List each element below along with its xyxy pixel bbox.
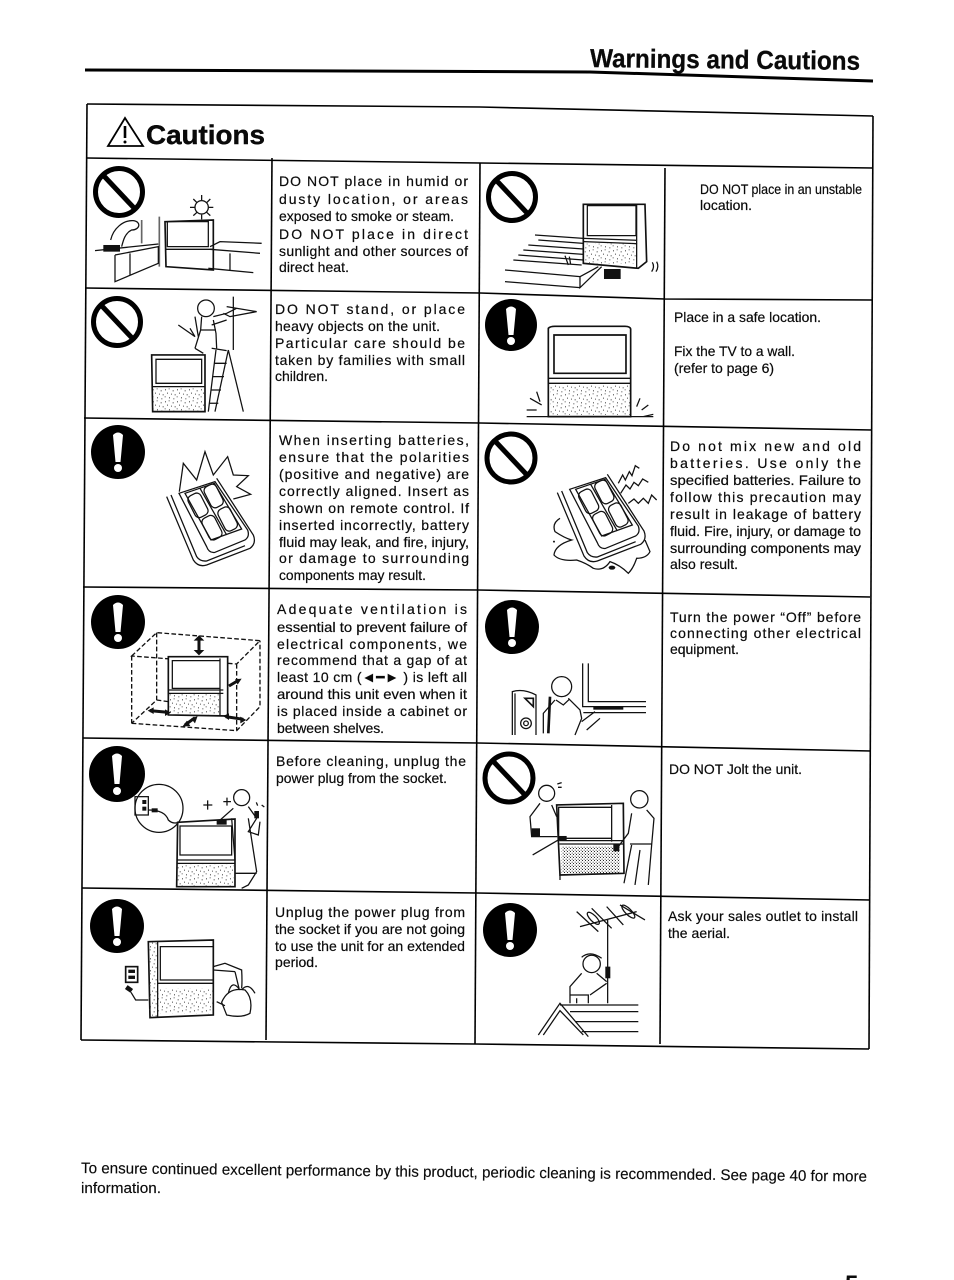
text block: inserted incorrectly, battery [279, 517, 469, 533]
text block: equipment. [670, 641, 739, 657]
icon: exclamation [90, 899, 144, 953]
icon: exclamation [89, 746, 145, 802]
panel: unplug before cleaning [89, 746, 466, 888]
text block: also result. [670, 556, 738, 572]
illustration: man connecting equipment to TV [512, 663, 646, 735]
text block: direct heat. [279, 259, 349, 275]
text block: sunlight and other sources of [279, 243, 468, 259]
illustration: two men carrying TV [530, 783, 654, 885]
icon: exclamation [485, 299, 537, 351]
text block: surrounding components may [670, 540, 861, 556]
text block [275, 904, 465, 970]
text block: (refer to page 6) [674, 360, 774, 376]
illustration: worker installing aerial on roof [538, 903, 645, 1037]
panel: aerial installation [483, 903, 858, 1037]
illustration: remote with leaking batteries [553, 466, 657, 573]
icon: exclamation [91, 425, 145, 479]
footer note [81, 1160, 867, 1197]
text block [668, 908, 858, 941]
illustration: TV with plug and suitcase [125, 940, 255, 1018]
text block [275, 301, 465, 384]
text block: Unplug the power plug from [275, 904, 465, 920]
illustration: TV on uneven steps [505, 204, 658, 288]
text block: Particular care should be [275, 335, 465, 351]
illustration: TV in dashed cabinet with gap arrows [132, 633, 260, 731]
icon: prohibition [487, 434, 535, 482]
icon: prohibition [94, 298, 140, 346]
text block [674, 309, 821, 376]
text block: Ask your sales outlet to install [668, 908, 858, 924]
panel: humid or dusty location [95, 168, 468, 282]
footer note: To ensure continued excellent performance by this product, periodic cleaning is recommended. See page 40 for more [81, 1160, 867, 1186]
text block: Place in a safe location. [674, 309, 821, 325]
text block: is placed inside a cabinet or [277, 703, 467, 719]
text block [670, 609, 861, 657]
icon: prohibition [485, 754, 533, 802]
text block: specified batteries. Failure to [670, 472, 861, 488]
illustration: child on ladder above TV [152, 297, 257, 412]
text block: fluid. Fire, injury, or damage to [670, 523, 861, 539]
text block: heavy objects on the unit. [275, 318, 440, 334]
text block: Turn the power “Off” before [670, 609, 861, 625]
text block: (positive and negative) are [279, 466, 469, 482]
text block: shown on remote control. If [279, 500, 469, 516]
illustration: TV near kitchen and sun [95, 195, 262, 282]
panel: do not jolt [485, 754, 802, 885]
panel: ventilation [91, 595, 467, 736]
panel: power off before connecting [485, 600, 861, 735]
text block: DO NOT place in an unstable [700, 181, 862, 197]
text block: or damage to surrounding [279, 550, 469, 566]
illustration: person unplugging TV at socket [135, 784, 264, 888]
text block: recommend that a gap of at [277, 652, 467, 668]
text block [277, 601, 467, 736]
text block: electrical components, we [277, 636, 467, 652]
text block [279, 432, 469, 583]
text block: the aerial. [668, 925, 730, 941]
icon: prohibition [488, 174, 536, 220]
title: Warnings and Cautions: Warnings and Cautions [590, 43, 860, 76]
text block: components may result. [279, 567, 426, 583]
text block: DO NOT stand, or place [275, 301, 465, 317]
text block: essential to prevent failure of [277, 619, 467, 635]
text block [700, 181, 862, 213]
text block: Before cleaning, unplug the [276, 753, 466, 769]
text block: around this unit even when it [277, 686, 467, 702]
panel: unstable location [488, 174, 862, 288]
text block: between shelves. [277, 720, 384, 736]
heading: Cautions with warning triangle: Cautions [146, 120, 265, 150]
text block: result in leakage of battery [670, 506, 861, 522]
footer note: information. [81, 1180, 161, 1197]
icon: prohibition [96, 168, 142, 216]
text block: When inserting batteries, [279, 432, 469, 448]
text block: Adequate ventilation is [277, 601, 467, 617]
text block: to use the unit for an extended [275, 938, 465, 954]
text block: power plug from the socket. [276, 770, 447, 786]
text block: children. [275, 368, 328, 384]
text block: DO NOT place in direct [279, 226, 468, 242]
icon: exclamation [485, 600, 539, 654]
panel: do not mix batteries [487, 434, 861, 573]
header rule [85, 70, 873, 81]
text block: location. [700, 197, 752, 213]
text block: batteries. Use only the [670, 455, 861, 471]
table grid [81, 104, 873, 1049]
text block: Fix the TV to a wall. [674, 343, 795, 359]
illustration: TV fixed to wall [527, 326, 653, 417]
text block: least 10 cm (◄━► ) is left all [277, 669, 467, 685]
text block [276, 753, 466, 786]
illustration: remote with batteries and flash [167, 452, 254, 566]
heading: Cautions with warning triangle [108, 118, 265, 150]
text block: taken by families with small [275, 352, 465, 368]
text block: DO NOT Jolt the unit. [669, 761, 802, 777]
text block: follow this precaution may [670, 489, 861, 505]
icon: exclamation [91, 595, 145, 649]
icon: exclamation [483, 903, 537, 957]
panel: unplug when not in use [90, 899, 465, 1018]
text block: Do not mix new and old [670, 438, 861, 454]
panel: place in a safe location [485, 299, 821, 417]
text block: connecting other electrical [670, 625, 861, 641]
text block [279, 173, 468, 275]
text block [670, 438, 861, 572]
text block: ensure that the polarities [279, 449, 469, 465]
text block: fluid may leak, and fire, injury, [279, 534, 469, 550]
text block: DO NOT place in humid or [279, 173, 468, 189]
text block: exposed to smoke or steam. [279, 208, 454, 224]
text block: correctly aligned. Insert as [279, 483, 469, 499]
text block: dusty location, or areas [279, 191, 468, 207]
text block: the socket if you are not going [275, 921, 465, 937]
panel: do not stand on the unit [94, 297, 465, 412]
panel: inserting batteries [91, 425, 469, 583]
text block: period. [275, 954, 318, 970]
